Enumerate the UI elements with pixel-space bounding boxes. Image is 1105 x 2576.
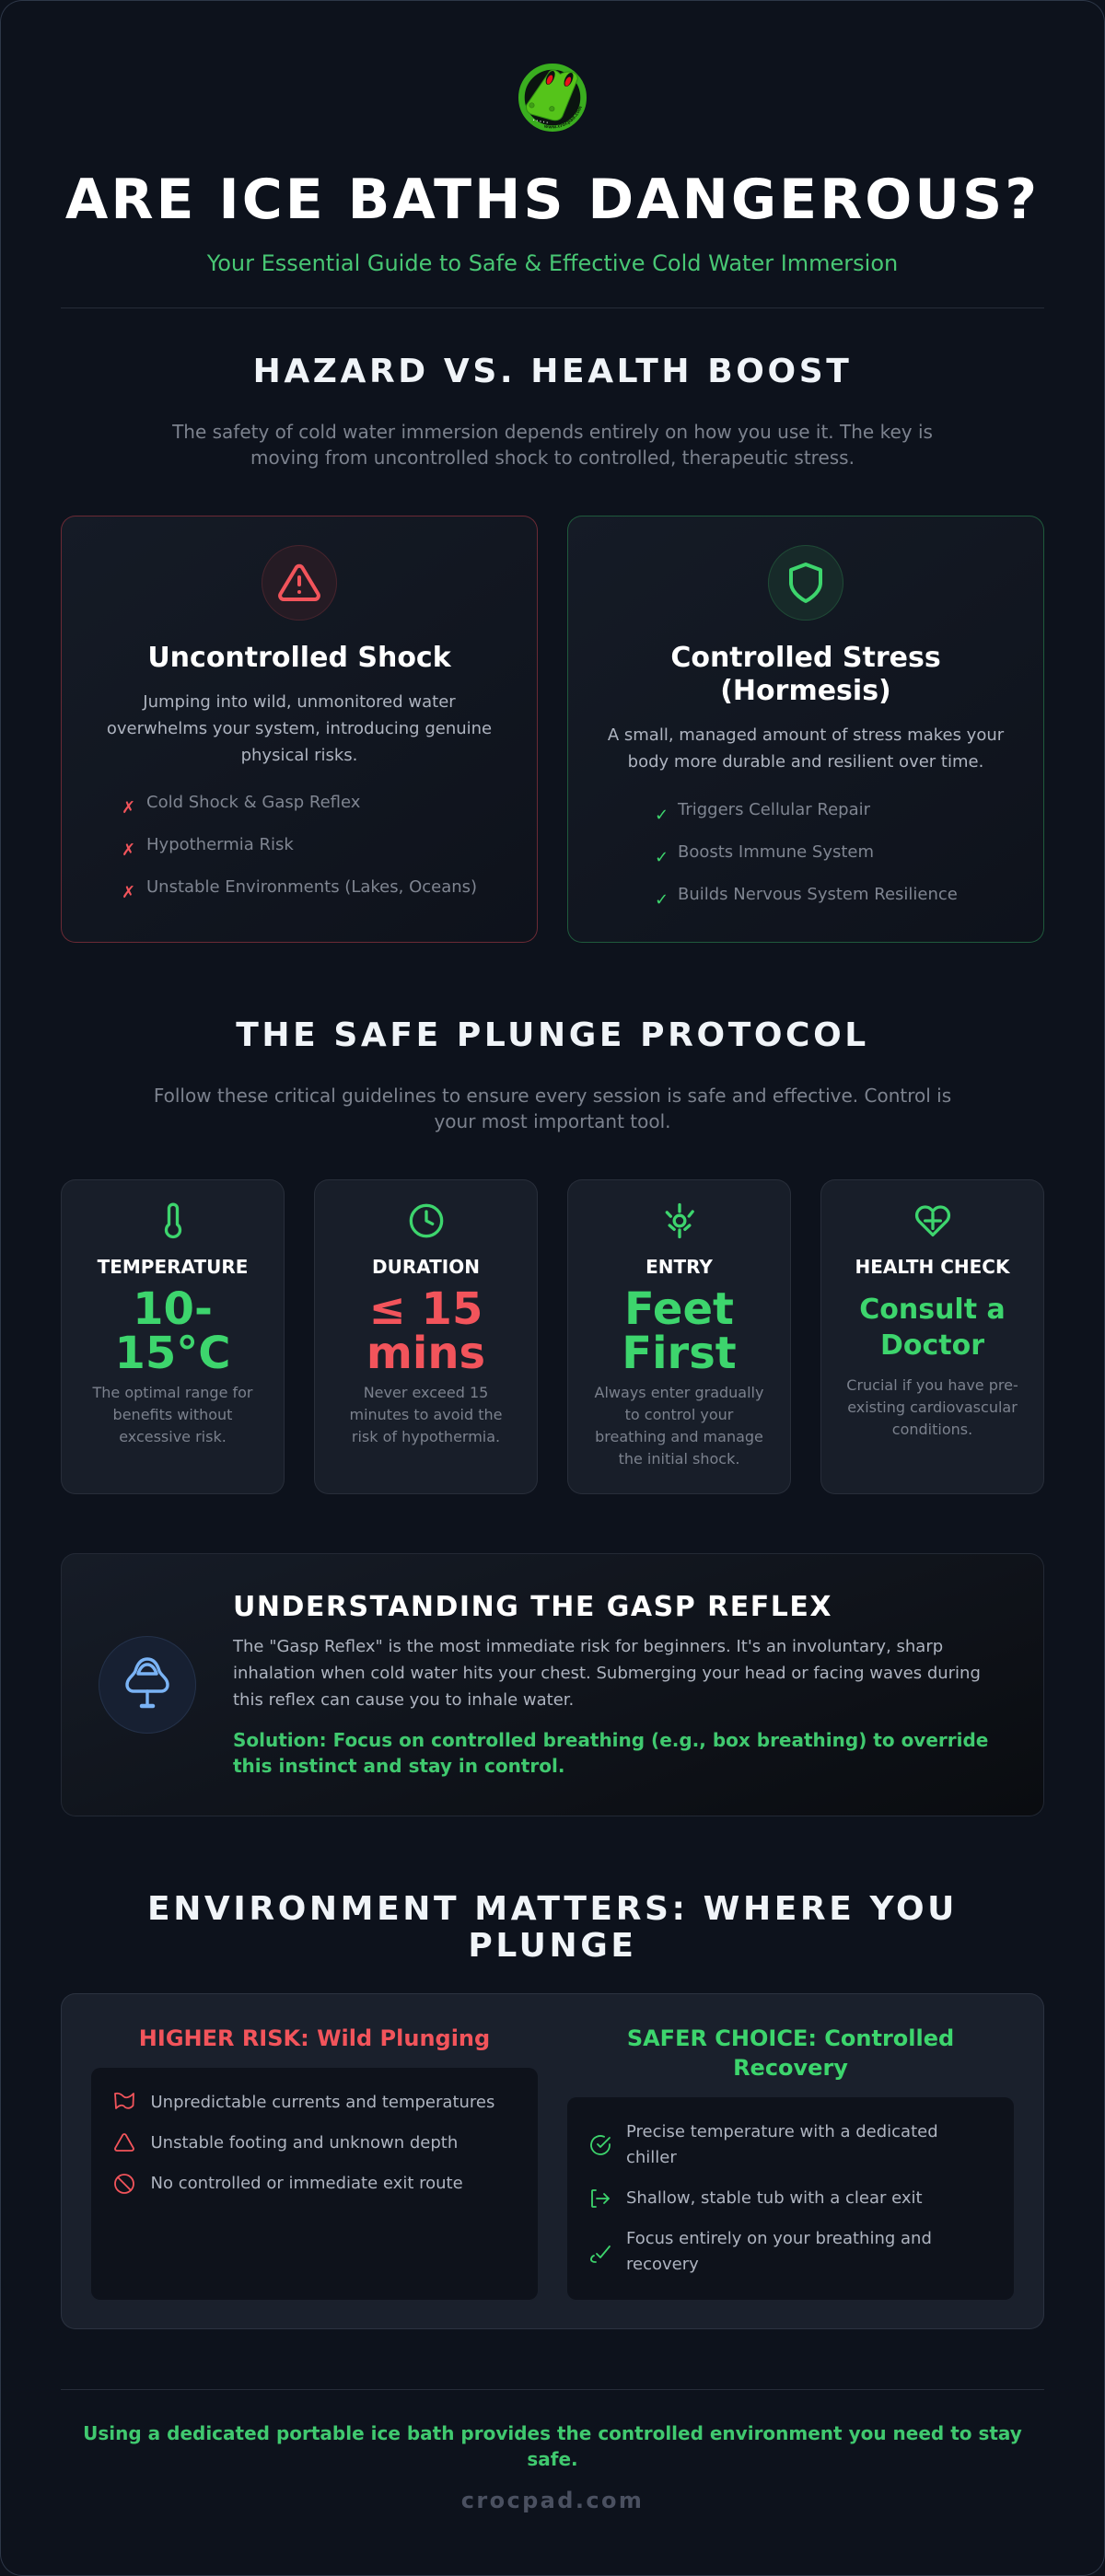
risk item: unstable environments: Unstable Environments (Lakes, Oceans) [146, 877, 477, 897]
label: HEALTH CHECK [855, 1256, 1009, 1278]
heading: safe plunge protocol: THE SAFE PLUNGE PROTOCOL [236, 1016, 869, 1054]
description: the initial shock. [619, 1450, 739, 1468]
icon: breathing check [590, 2245, 611, 2263]
intro paragraph: protocol: your most important tool. [434, 1110, 671, 1132]
marker: ✓ [655, 848, 669, 867]
card description: Jumping into wild, unmonitored water [143, 692, 456, 712]
card description [107, 692, 492, 765]
value [114, 1283, 231, 1379]
description [595, 1384, 763, 1468]
panel: duration [314, 1179, 538, 1494]
footer message [83, 2422, 1022, 2470]
safer choice heading: Recovery [733, 2055, 848, 2081]
heading: environment matters [147, 1890, 958, 1965]
value: First [622, 1328, 737, 1379]
benefit item: immune system: Boosts Immune System [678, 842, 874, 862]
benefit text [626, 2122, 938, 2167]
label: DURATION [372, 1256, 480, 1278]
label: ENTRY [646, 1256, 713, 1278]
description: existing cardiovascular [847, 1398, 1018, 1416]
icon: check circle [590, 2135, 611, 2155]
safer choice heading: SAFER CHOICE: Controlled [627, 2025, 954, 2051]
icon: thermometer [164, 1202, 182, 1239]
value: 15°C [114, 1328, 231, 1379]
card heading: Controlled Stress [670, 642, 941, 674]
description: breathing and manage [595, 1428, 763, 1445]
icon: no entry [114, 2174, 134, 2194]
marker: ✓ [655, 806, 669, 825]
card heading [670, 642, 941, 707]
benefit text: Precise temperature with a dedicated [626, 2122, 938, 2141]
description [349, 1384, 503, 1445]
intro paragraph: protocol: Follow these critical guidelines to ensure every session is safe and effective. Control is [154, 1085, 951, 1107]
card heading: Uncontrolled Shock [147, 642, 451, 674]
description: The optimal range for [92, 1384, 253, 1401]
intro paragraph: hazard vs health boost [172, 421, 933, 469]
heading: hazard vs health boost: HAZARD VS. HEALTH BOOST [253, 353, 852, 390]
description: Crucial if you have pre- [846, 1376, 1018, 1394]
icon: warning triangle [262, 545, 337, 621]
icon: clock [409, 1204, 444, 1237]
description: benefits without [113, 1406, 232, 1423]
panel: controlled stress [567, 516, 1044, 943]
icon: waves [114, 2092, 134, 2109]
benefit item: cellular repair: Triggers Cellular Repair [678, 800, 870, 819]
description: Always enter gradually [595, 1384, 763, 1401]
description: conditions. [892, 1421, 972, 1438]
description [92, 1384, 253, 1445]
description: Never exceed 15 [364, 1384, 488, 1401]
description [846, 1376, 1018, 1438]
safer choice list [567, 2097, 1014, 2300]
card description: physical risks. [241, 746, 357, 765]
title: ARE ICE BATHS DANGEROUS? [65, 168, 1040, 232]
card heading: (Hormesis) [720, 675, 891, 707]
card description [608, 725, 1004, 772]
description: to control your [625, 1406, 733, 1423]
risk text: No controlled or immediate exit route [151, 2174, 463, 2193]
panel: understanding the gasp reflex [61, 1553, 1044, 1816]
marker: ✓ [655, 890, 669, 910]
description: risk of hypothermia. [352, 1428, 500, 1445]
marker: ✗ [122, 798, 135, 818]
card description: overwhelms your system, introducing genuine [107, 719, 492, 738]
safer choice heading [627, 2025, 954, 2081]
benefit text [626, 2229, 932, 2274]
description: excessive risk. [119, 1428, 227, 1445]
icon: triangle [114, 2133, 134, 2152]
card description: A small, managed amount of stress makes your [608, 725, 1004, 745]
benefit text: Shallow, stable tub with a clear exit [626, 2188, 923, 2208]
value: Feet [624, 1283, 734, 1335]
icon: exit [591, 2189, 610, 2208]
benefit text: recovery [626, 2255, 699, 2274]
footer message: Using a dedicated portable ice bath provides the controlled environment you need to stay [83, 2422, 1022, 2444]
panel: environment comparison [61, 1993, 1044, 2329]
risk item: hypothermia: Hypothermia Risk [146, 835, 294, 854]
card description: body more durable and resilient over time. [628, 752, 983, 772]
solution text [233, 1729, 988, 1777]
explanation text: this reflex can cause you to inhale water. [233, 1690, 574, 1710]
icon: lungs in circle [99, 1636, 196, 1734]
benefit text: chiller [626, 2148, 677, 2167]
intro paragraph: protocol [154, 1085, 951, 1132]
intro paragraph: hazard vs health boost: The safety of cold water immersion depends entirely on how you use it. The key is [172, 421, 933, 443]
panel: temperature [61, 1179, 285, 1494]
risk item: cold shock: Cold Shock & Gasp Reflex [146, 793, 360, 812]
benefit item: nervous system: Builds Nervous System Resilience [678, 885, 958, 904]
benefit text: Focus entirely on your breathing and [626, 2229, 932, 2248]
value [366, 1283, 485, 1379]
heading: environment matters: ENVIRONMENT MATTERS: WHERE YOU [147, 1890, 958, 1928]
value: 10- [133, 1283, 213, 1335]
higher risk heading: HIGHER RISK: Wild Plunging [139, 2025, 490, 2051]
value: Consult a [859, 1294, 1006, 1326]
panel: entry [567, 1179, 791, 1494]
icon: heart with plus [915, 1205, 950, 1237]
value [859, 1294, 1006, 1362]
explanation text: The "Gasp Reflex" is the most immediate risk for beginners. It's an involuntary, sharp [233, 1637, 943, 1656]
marker: ✗ [122, 841, 135, 860]
heading: UNDERSTANDING THE GASP REFLEX [233, 1591, 832, 1623]
heading: environment matters: PLUNGE [468, 1927, 637, 1965]
intro paragraph: hazard vs health boost: moving from uncontrolled shock to controlled, therapeutic stress. [250, 447, 855, 469]
value: ≤ 15 [369, 1283, 483, 1335]
marker: ✗ [122, 883, 135, 902]
value: Doctor [880, 1329, 984, 1362]
footer message: safe. [527, 2448, 578, 2470]
panel: health check [820, 1179, 1044, 1494]
risk text: Unstable footing and unknown depth [151, 2133, 458, 2152]
panel: uncontrolled shock [61, 516, 538, 943]
logo: crocpad crocodile badge [518, 64, 587, 132]
icon: entry burst [665, 1202, 694, 1239]
description: minutes to avoid the [349, 1406, 503, 1423]
label: TEMPERATURE [98, 1256, 248, 1278]
logo: crocpad crocodile badge: www.crocpad.com [544, 107, 582, 129]
higher risk list [91, 2068, 538, 2300]
risk text: Unpredictable currents and temperatures [151, 2093, 494, 2112]
value: mins [366, 1328, 485, 1379]
explanation text [232, 1637, 981, 1710]
explanation text: inhalation when cold water hits your chest. Submerging your head or facing waves during [233, 1664, 981, 1683]
solution text: this instinct and stay in control. [233, 1755, 564, 1777]
footer brand: crocpad.com [461, 2488, 644, 2513]
subtitle: Your Essential Guide to Safe & Effective Cold Water Immersion [207, 250, 898, 276]
solution text: Solution: Focus on controlled breathing (e.g., box breathing) to override [233, 1729, 988, 1751]
value [622, 1283, 737, 1379]
icon: shield [768, 545, 843, 621]
